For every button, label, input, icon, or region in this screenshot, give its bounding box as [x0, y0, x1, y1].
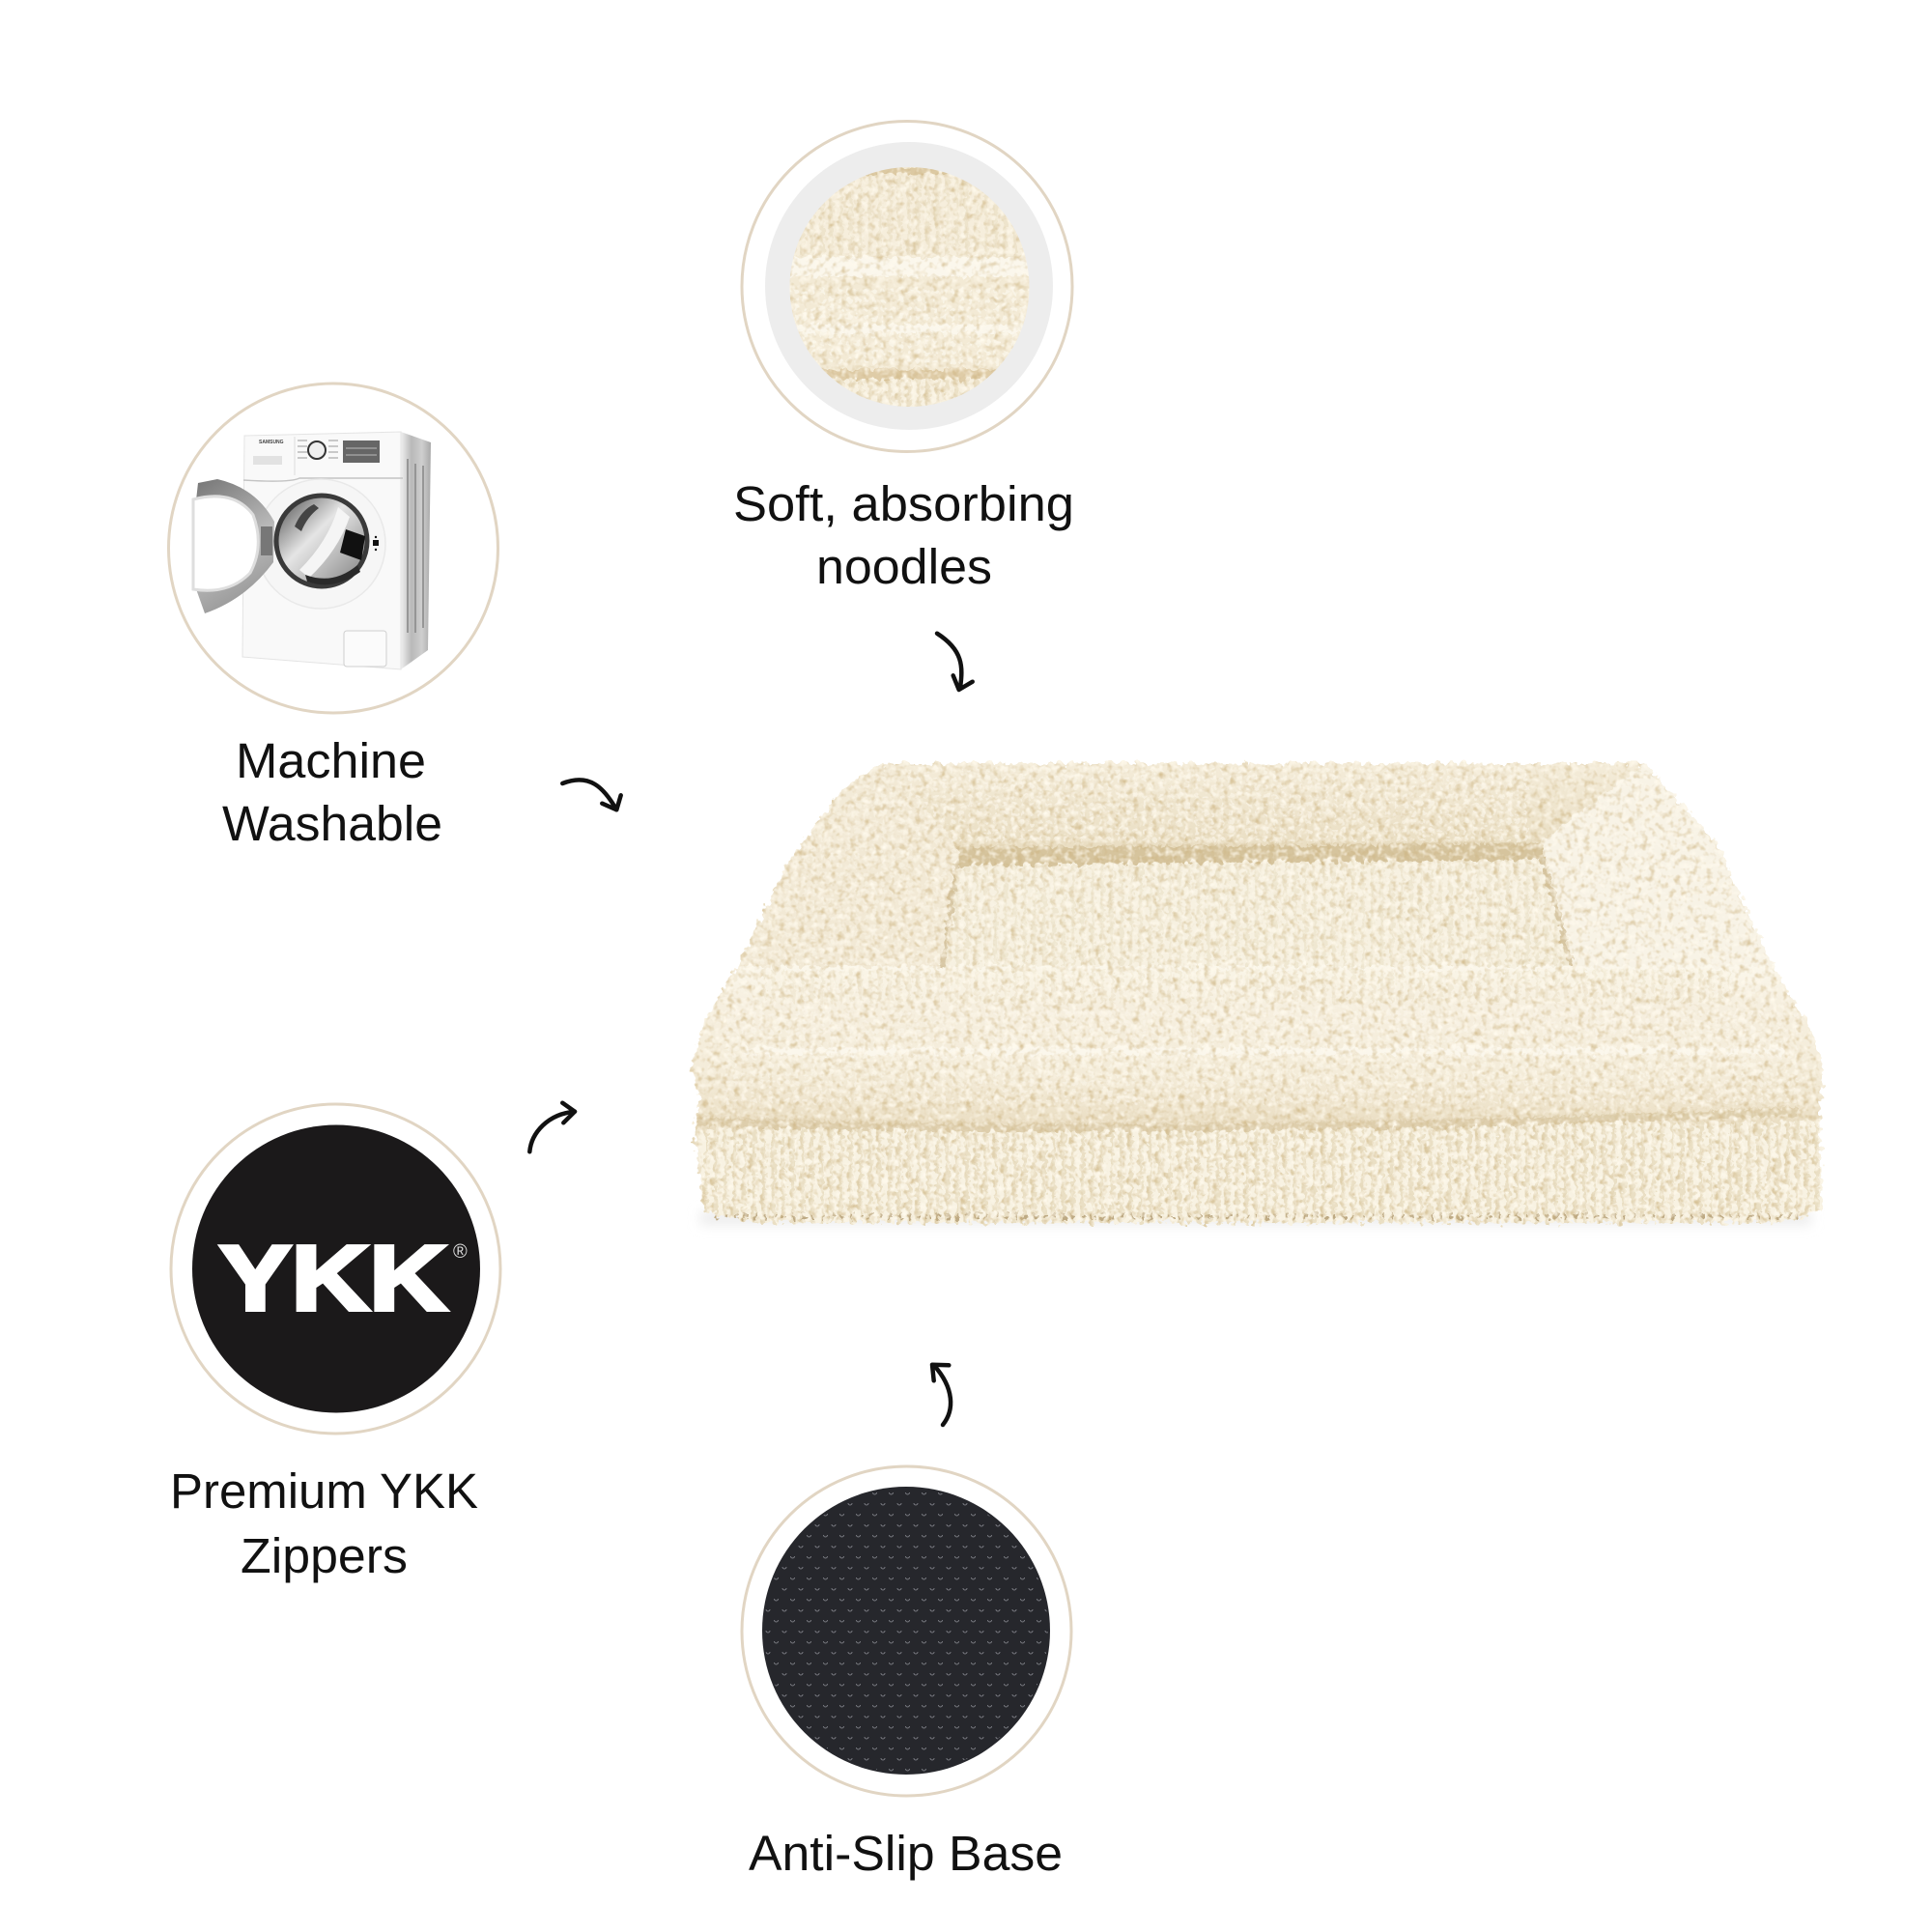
right bolster: [1541, 763, 1774, 970]
dark textured base swatch: [762, 1487, 1050, 1775]
left bolster: [743, 763, 959, 968]
circle ring: [742, 1466, 1071, 1796]
label: soft absorbing noodles: [733, 476, 1074, 594]
lower side wall: [696, 1111, 1822, 1223]
arrow: washable to bed: [562, 780, 621, 810]
label: soft absorbing noodles: noodles: [816, 539, 992, 594]
floor shadow: [700, 1211, 1811, 1225]
YKK logo: ®: [453, 1241, 468, 1263]
label: premium YKK zippers: Zippers: [241, 1528, 408, 1583]
back bolster: [883, 763, 1644, 847]
panel: soft absorbing noodles: [742, 122, 1072, 452]
circle ring: [742, 122, 1072, 452]
YKK logo: YKK: [219, 1227, 447, 1330]
label: premium YKK zippers: [170, 1463, 478, 1583]
panel: anti-slip base: [742, 1466, 1071, 1796]
arrow: zippers to bed: [529, 1103, 575, 1151]
bed silhouette: [692, 763, 1823, 1223]
label: soft absorbing noodles: Soft, absorbing: [733, 476, 1074, 531]
label: machine washable: [222, 733, 442, 851]
product: noodle dog bed: [692, 763, 1823, 1223]
arrow: base to bed: [932, 1365, 951, 1425]
panel: machine washable: [168, 384, 498, 713]
back seam shadow: [957, 842, 1546, 867]
label: premium YKK zippers: Premium YKK: [170, 1463, 478, 1519]
black logo disc: [192, 1124, 480, 1412]
arrow: noodles to bed: [937, 634, 973, 690]
label: machine washable: Machine: [236, 733, 426, 788]
label: anti-slip base: Anti-Slip Base: [749, 1826, 1063, 1881]
panel: premium YKK zippers: [171, 1104, 500, 1434]
circle ring: [171, 1104, 500, 1434]
circle ring: [168, 384, 498, 713]
label: machine washable: Washable: [222, 796, 442, 851]
noodle texture swatch: [790, 167, 1030, 407]
icon: washing machine: [193, 432, 431, 669]
grey backing disc: [765, 142, 1053, 430]
front bolster top: [692, 966, 1823, 1130]
inner sleeping well: [942, 858, 1572, 970]
icon: washing machine: SAMSUNG: [259, 440, 284, 445]
